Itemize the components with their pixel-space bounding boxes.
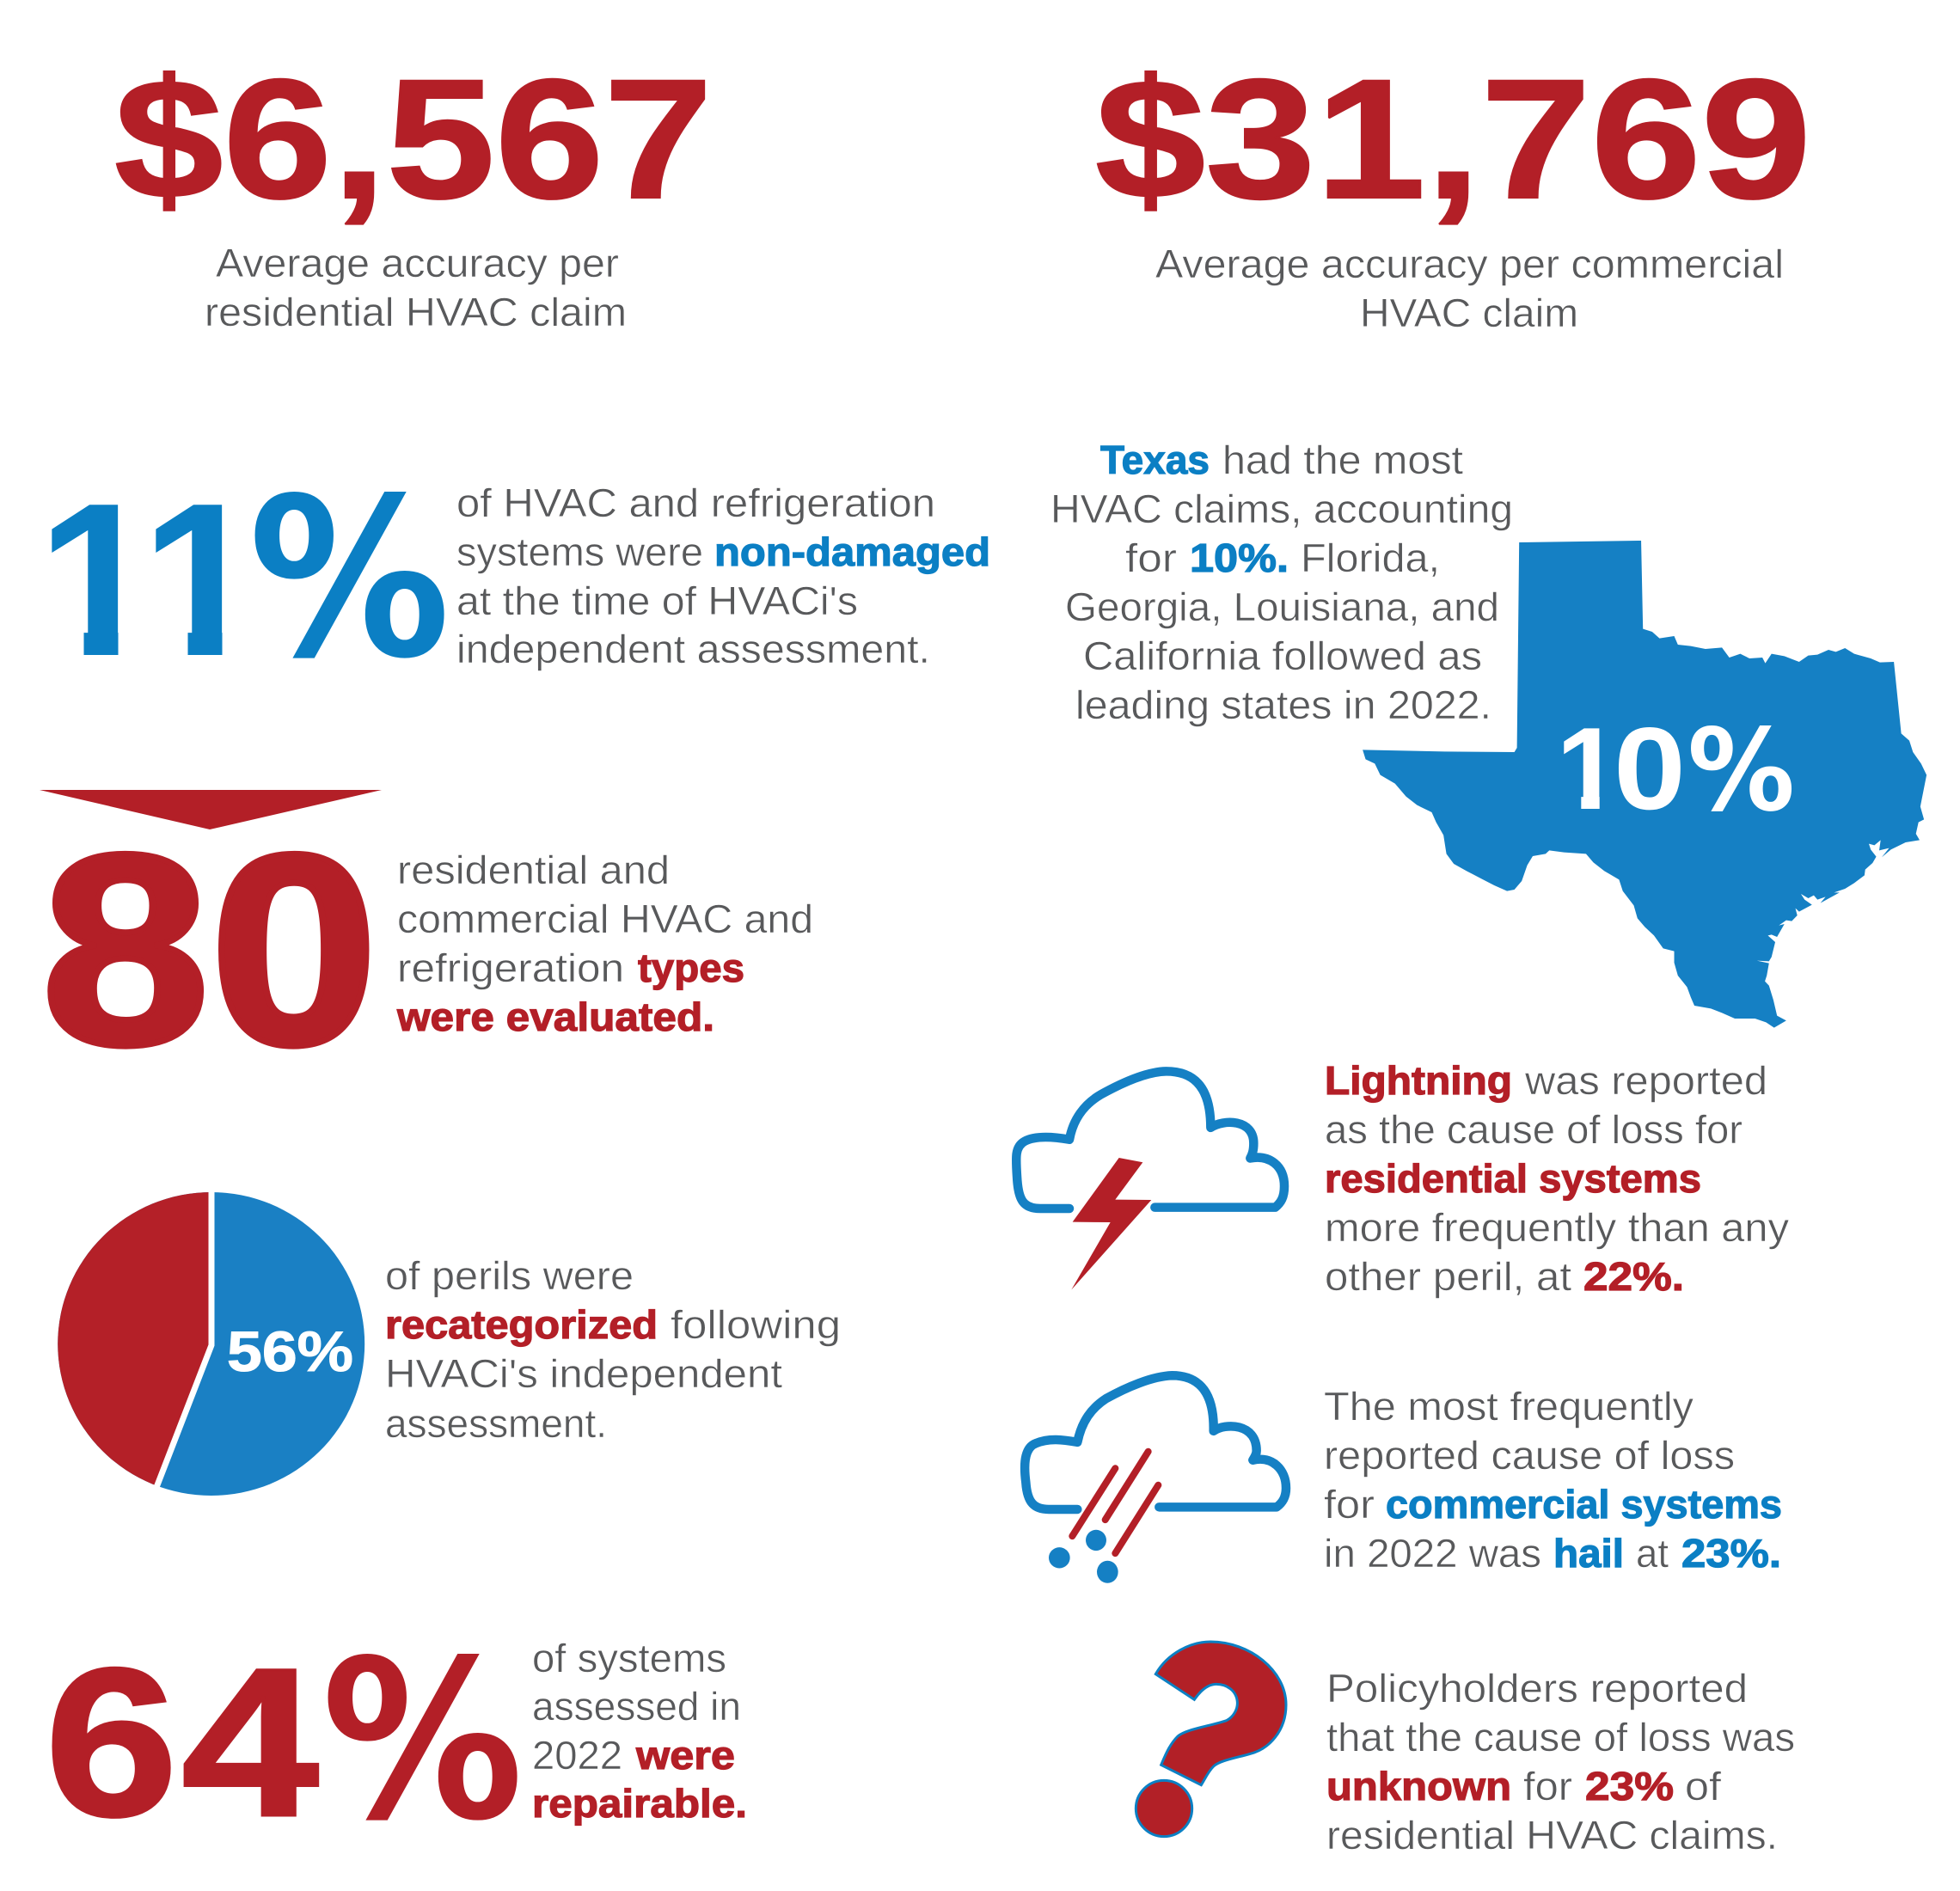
text: lightning description: other peril, at	[1325, 1254, 1571, 1299]
text: perils description: assessment.	[385, 1401, 607, 1446]
text: types description: refrigeration	[397, 946, 624, 990]
text: perils description: of perils were	[385, 1253, 634, 1298]
panel: residential average	[114, 44, 713, 334]
text: repairable description: were	[635, 1733, 735, 1778]
text: hail description: hail	[1553, 1531, 1624, 1576]
panel: repairable	[45, 1613, 747, 1870]
text: hail description: for	[1324, 1482, 1375, 1527]
text: unknown description: residential HVAC claims.	[1326, 1813, 1778, 1857]
text: repairable description: 2022	[532, 1733, 622, 1778]
text: unknown description: 23%	[1585, 1764, 1674, 1808]
text: hail description: commercial systems	[1386, 1482, 1782, 1527]
caption: commercial claim: HVAC claim	[1360, 291, 1578, 335]
stat: 80: 80	[41, 798, 378, 1101]
text: hail description: in 2022 was	[1324, 1531, 1541, 1576]
text: lightning description: residential systems	[1325, 1156, 1701, 1201]
panel: Texas	[1050, 438, 1926, 1028]
text: Texas description: Georgia, Louisiana, and	[1065, 584, 1499, 629]
pie chart: 56 percent	[58, 1190, 364, 1496]
text: Texas description: Texas	[1100, 438, 1210, 482]
panel: commercial average	[1095, 44, 1811, 335]
map label: 10%: %	[1687, 705, 1795, 837]
text: lightning description: 22%.	[1583, 1254, 1684, 1299]
icon: question mark	[1136, 1642, 1286, 1837]
text: Texas description: California followed as	[1083, 633, 1482, 678]
caption: residential claim: residential HVAC claim	[205, 290, 627, 334]
text: lightning description: was reported	[1524, 1058, 1767, 1103]
text: repairable description: assessed in	[532, 1684, 741, 1729]
text: types description: types	[638, 946, 744, 990]
panel: non-damaged	[37, 451, 990, 707]
stat: 11%	[37, 451, 450, 707]
panel: lightning	[1016, 1058, 1789, 1299]
text: types description: were evaluated.	[396, 994, 714, 1039]
text: Texas description: 10%.	[1190, 535, 1289, 580]
text: non-damaged description: independent assessment.	[456, 627, 930, 671]
text: repairable description: of systems	[532, 1636, 726, 1680]
text: perils description: HVACi's independent	[385, 1351, 782, 1396]
panel: 80 types	[40, 790, 813, 1101]
text: Texas description: Florida,	[1301, 535, 1440, 580]
icon: hail cloud	[1025, 1375, 1286, 1583]
stat: 64%: %	[322, 1613, 524, 1870]
text: types description: commercial HVAC and	[397, 897, 813, 941]
stat: 11%: 1	[37, 457, 158, 701]
stat: 64%: 4	[181, 1625, 319, 1861]
text: non-damaged description: non-damaged	[714, 529, 990, 574]
stat: $31,769: $31,769	[1095, 44, 1811, 234]
panel: recategorized perils	[58, 1190, 841, 1496]
text: hail description: The most frequently	[1324, 1384, 1694, 1429]
map label: 10%: 0	[1614, 703, 1686, 834]
text: lightning description: more frequently than any	[1325, 1205, 1789, 1250]
map label: 10%	[1556, 703, 1795, 837]
text: hail description: reported cause of loss	[1324, 1433, 1735, 1478]
caption: residential claim: Average accuracy per	[216, 241, 619, 285]
panel: hail	[1025, 1375, 1782, 1583]
text: lightning description: Lightning	[1325, 1058, 1512, 1103]
stat: 11%: 1	[141, 457, 262, 701]
text: Texas description: HVAC claims, accounting	[1050, 487, 1513, 531]
text: types description: residential and	[397, 848, 670, 892]
text: perils description: following	[671, 1302, 841, 1347]
text: unknown description: for	[1523, 1764, 1572, 1808]
text: hail description: at	[1636, 1531, 1669, 1576]
icon: down arrowhead	[40, 790, 382, 829]
text: non-damaged description: at the time of HVACi's	[456, 578, 858, 623]
text: Texas description: for	[1125, 535, 1177, 580]
caption: commercial claim: Average accuracy per commercial	[1155, 242, 1784, 286]
text: repairable description: repairable.	[532, 1781, 747, 1826]
text: Texas description: leading states in 2022.	[1075, 682, 1491, 727]
text: non-damaged description: of HVAC and refrigeration	[456, 480, 935, 525]
pie label: 56%	[227, 1319, 353, 1383]
icon: lightning cloud	[1016, 1071, 1284, 1290]
stat: 64%: 6	[45, 1625, 178, 1861]
text: hail description: 23%.	[1681, 1531, 1781, 1576]
panel: unknown cause	[1136, 1642, 1795, 1857]
map: Texas	[1363, 541, 1926, 1028]
text: perils description: recategorized	[385, 1302, 658, 1347]
text: unknown description: of	[1685, 1764, 1721, 1808]
stat: $6,567: $6,567	[114, 44, 713, 234]
text: Texas description: had the most	[1222, 438, 1463, 482]
text: unknown description: that the cause of loss was	[1326, 1715, 1795, 1759]
text: unknown description: unknown	[1326, 1764, 1511, 1808]
text: non-damaged description: systems were	[456, 529, 703, 574]
text: unknown description: Policyholders reported	[1326, 1666, 1748, 1710]
map label: 10%: 1	[1556, 703, 1621, 834]
stat: 11%: %	[248, 451, 450, 707]
text: lightning description: as the cause of loss for	[1325, 1107, 1743, 1152]
